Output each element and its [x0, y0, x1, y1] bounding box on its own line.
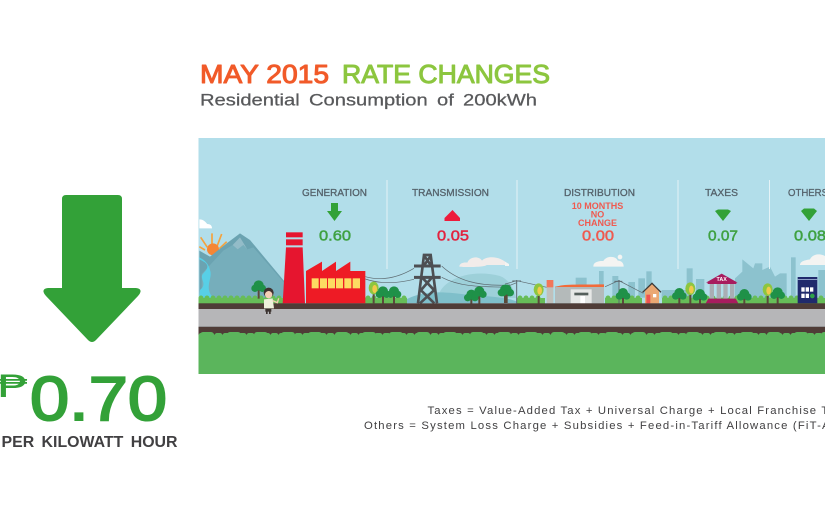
column: distribution: [564, 187, 635, 244]
column: generation: GENERATION: [302, 187, 367, 199]
panel: illustrated street scene: [198, 138, 825, 374]
total rate value: 0.70: [30, 365, 167, 434]
icon: power plant chimney: [283, 232, 305, 303]
hedge along the street: [198, 298, 825, 304]
column: generation: 0.60: [319, 228, 351, 244]
subtitle: Residential Consumption of 200kWh: [200, 92, 537, 110]
icon: tax building: TAX: [717, 277, 727, 283]
column: transmission: TRANSMISSION: [412, 187, 489, 199]
icon: gas station and shop: [547, 280, 604, 303]
icon: office building: [798, 277, 817, 303]
icon: girl character: [264, 288, 279, 314]
column: transmission: [412, 187, 489, 244]
distant hills: [400, 273, 520, 303]
street: [198, 303, 825, 309]
icon: transmission tower: [414, 255, 441, 303]
icon: big down arrow: [43, 195, 141, 342]
icon: factory: [306, 262, 365, 303]
column: taxes: [705, 187, 738, 244]
icon: house: [643, 283, 661, 303]
green foreground: [198, 335, 825, 374]
icon: clouds: [459, 254, 825, 267]
column: others: [788, 187, 825, 244]
column: others: 0.08: [794, 228, 825, 244]
column: taxes: 0.07: [708, 228, 738, 244]
title: [200, 61, 550, 89]
column: taxes: TAXES: [705, 187, 738, 199]
column: distribution: 10 MONTHS: [572, 201, 623, 211]
icon: trees: [251, 280, 785, 308]
column: generation: [302, 187, 367, 244]
column: transmission: 0.05: [437, 228, 469, 244]
city skyline: [576, 257, 825, 299]
power lines: [365, 266, 643, 303]
column: distribution: 0.00: [582, 228, 614, 244]
icon: tax building: [706, 274, 738, 303]
title: MAY 2015: [200, 61, 329, 89]
column dividers: [387, 180, 770, 269]
column: distribution: NO: [591, 210, 604, 220]
icon: mountains, sun and river: [199, 219, 285, 299]
column: distribution: DISTRIBUTION: [564, 187, 635, 199]
column: distribution: CHANGE: [578, 218, 617, 228]
per kilowatt hour label: PER KILOWATT HOUR: [2, 434, 178, 451]
title: RATE CHANGES: [342, 61, 550, 89]
